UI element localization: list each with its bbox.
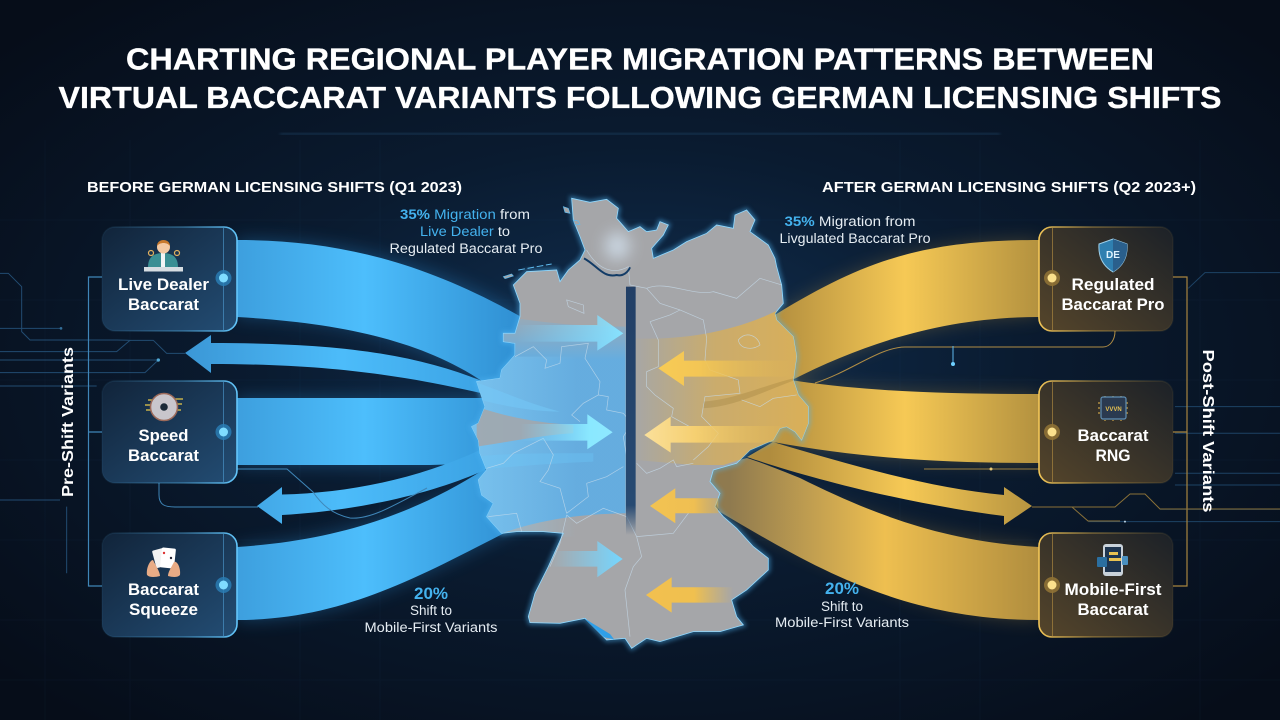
title: VIRTUAL BACCARAT VARIANTS FOLLOWING GERMAN LICENSING SHIFTS — [58, 80, 1222, 115]
overlay: grey wedge — [477, 407, 573, 447]
callout: 35% right: 35% Migration from — [784, 214, 916, 229]
callout: 35% left: Regulated Baccarat Pro — [390, 241, 542, 256]
label: regulated baccarat pro: Baccarat Pro — [1062, 295, 1164, 314]
band: speed — [237, 398, 530, 465]
icon: speed wheel — [145, 394, 183, 420]
label: regulated baccarat pro: Regulated — [1072, 275, 1154, 294]
map land — [472, 198, 808, 648]
label: baccarat squeeze: Baccarat — [128, 580, 199, 599]
overlay: pale streak — [557, 454, 593, 463]
brackets — [88, 277, 1187, 586]
label: speed baccarat: Speed — [138, 426, 188, 445]
callout: 35% left — [390, 207, 542, 256]
heading: after: AFTER GERMAN LICENSING SHIFTS (Q2 2023+) — [822, 179, 1196, 196]
circuit lines: left — [0, 273, 185, 573]
overlay: blue west highlight — [472, 356, 557, 533]
callout: 35% left: 35% Migration from — [400, 207, 530, 222]
overlay: gold east — [641, 311, 808, 465]
label: baccarat squeeze: Squeeze — [129, 600, 198, 619]
arrow: gold 4 — [646, 577, 733, 613]
arrow: gold 1 — [658, 351, 793, 386]
map glow — [472, 198, 808, 648]
map islands — [503, 207, 580, 279]
side label: pre-shift variants: Pre-Shift Variants — [60, 347, 77, 497]
north highlight — [605, 232, 630, 260]
callout: 20% left — [364, 584, 498, 635]
card: mobile-first baccarat — [1039, 533, 1173, 637]
callout: 20% right: 20% — [825, 579, 859, 598]
germany map — [460, 198, 813, 648]
icon: shield DE: DE — [1106, 250, 1120, 261]
band: live dealer — [237, 240, 530, 385]
band: squeeze — [237, 470, 530, 620]
card: regulated baccarat pro — [1039, 227, 1173, 331]
flow glow: gold — [720, 240, 1039, 620]
band: mobile-first — [700, 458, 1039, 620]
centre divider — [626, 287, 636, 535]
label: regulated baccarat pro — [1062, 275, 1164, 314]
callout: 20% right: Mobile-First Variants — [775, 615, 909, 630]
card: baccarat rng — [1039, 381, 1173, 483]
arrow: gold 3 — [650, 488, 718, 523]
circuit lines: right — [1088, 273, 1280, 523]
arrow: blue 1 — [517, 315, 623, 351]
elbe river — [584, 258, 630, 276]
label: live dealer baccarat: Live Dealer — [118, 275, 209, 294]
icon: cards in hands — [147, 547, 180, 577]
overlay: light swoosh — [506, 394, 558, 412]
title: CHARTING REGIONAL PLAYER MIGRATION PATTERNS BETWEEN — [126, 42, 1154, 76]
callout: 20% left: Shift to — [410, 603, 452, 618]
card: baccarat squeeze — [102, 533, 237, 637]
callout: 20% left: 20% — [414, 584, 448, 603]
callout: 20% right: Shift to — [821, 599, 863, 614]
label: speed baccarat: Baccarat — [128, 446, 199, 465]
arrow: blue 3 — [550, 541, 623, 577]
callout: 20% right — [775, 579, 909, 630]
label: mobile-first baccarat — [1064, 580, 1162, 619]
arrow: gold 2 — [644, 417, 793, 453]
state borders — [487, 250, 797, 637]
arrow: back to left lower — [257, 450, 510, 524]
left flow bands — [185, 240, 530, 620]
label: baccarat rng: Baccarat — [1078, 426, 1149, 445]
arrow: back to left top — [185, 335, 510, 400]
callout: 20% left: Mobile-First Variants — [364, 620, 498, 635]
arrow: blue 2 — [520, 414, 613, 449]
heading: before: BEFORE GERMAN LICENSING SHIFTS (Q1 2023) — [87, 179, 462, 196]
connector lines — [159, 331, 1280, 521]
label: baccarat rng: RNG — [1096, 446, 1130, 465]
label: live dealer baccarat: Baccarat — [128, 295, 199, 314]
icon: dealer — [144, 240, 183, 272]
flow glow: blue — [237, 240, 530, 620]
card: speed baccarat — [102, 381, 237, 483]
band: regulated — [770, 240, 1039, 381]
overlay: gold shadow swoosh — [703, 378, 795, 408]
arrow: right to rng — [747, 442, 1032, 525]
label: speed baccarat — [128, 426, 199, 465]
icon: phone — [1097, 544, 1128, 576]
callout: 35% right — [780, 214, 930, 246]
title — [58, 42, 1222, 115]
regional overlays — [460, 303, 813, 550]
side label: post-shift variants: Post-Shift Variants — [1199, 350, 1216, 513]
band: rng — [770, 380, 1039, 463]
card: live dealer baccarat — [102, 227, 237, 331]
callout: 35% left: Live Dealer to — [420, 224, 510, 239]
icon: chip: VVVN — [1105, 407, 1122, 413]
label: baccarat squeeze — [128, 580, 199, 619]
label: live dealer baccarat — [118, 275, 209, 314]
label: baccarat rng — [1078, 426, 1149, 465]
lake constance — [584, 618, 614, 639]
label: mobile-first baccarat: Mobile-First — [1064, 580, 1162, 599]
overlay: blue west — [472, 319, 626, 534]
right flow bands — [700, 240, 1039, 620]
callout: 35% right: Livgulated Baccarat Pro — [780, 231, 930, 246]
label: mobile-first baccarat: Baccarat — [1078, 600, 1149, 619]
